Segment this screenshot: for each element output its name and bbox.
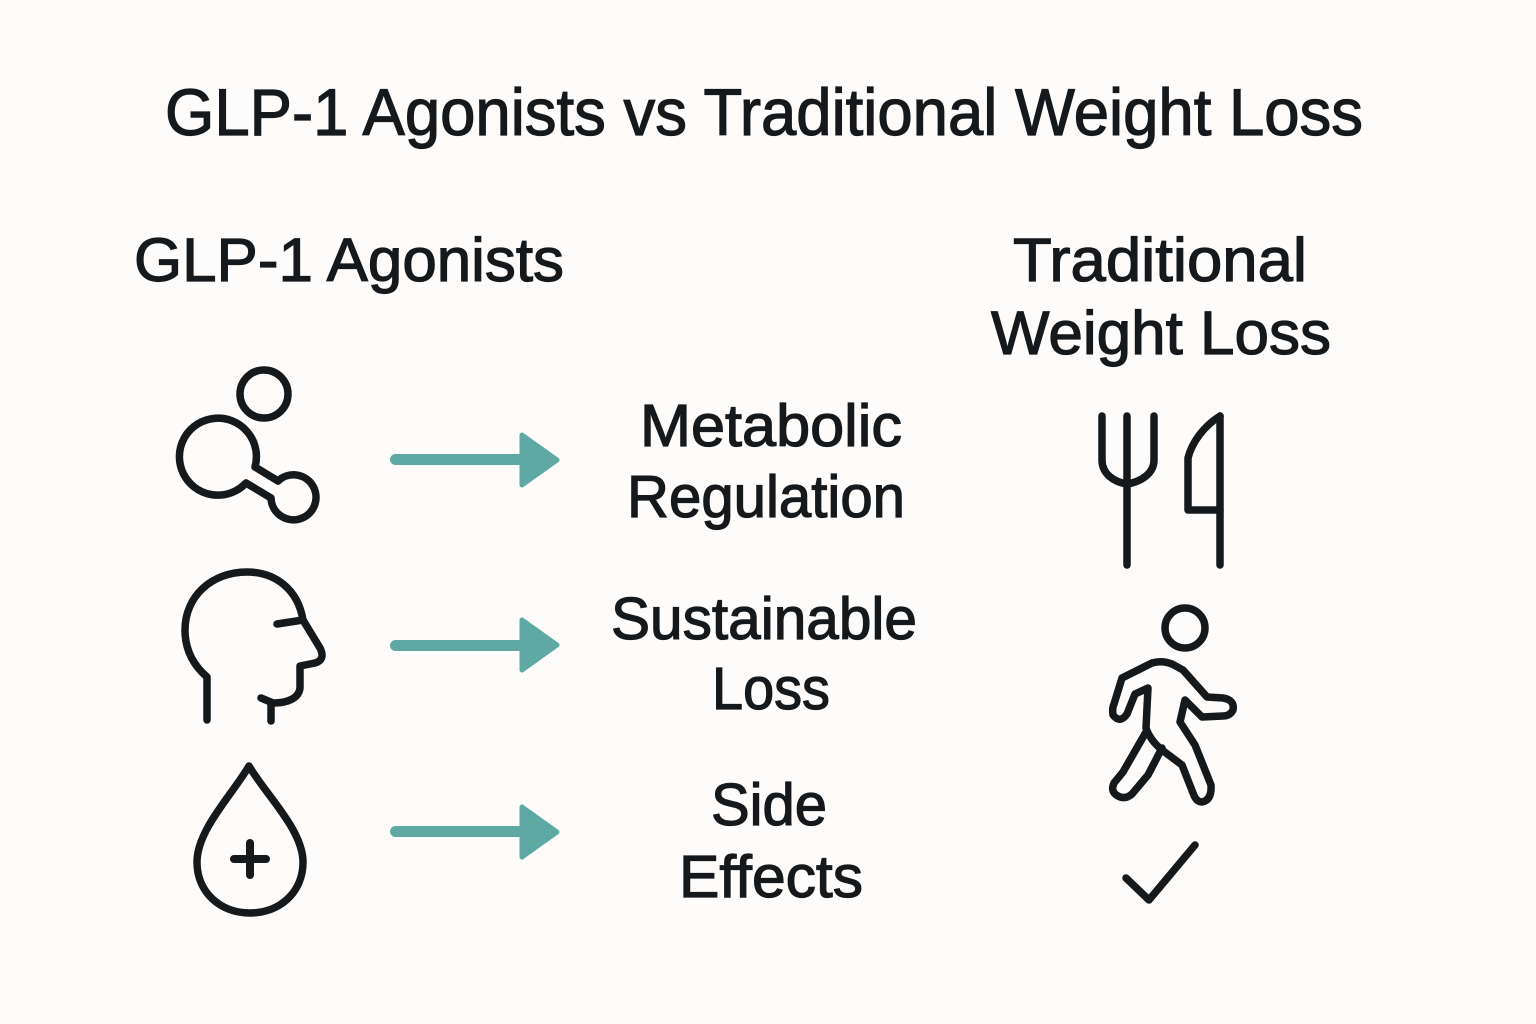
label: Side Effects — [679, 772, 863, 910]
icon: head profile — [185, 572, 322, 721]
heading: GLP-1 Agonists: GLP-1 Agonists — [134, 226, 564, 294]
heading: Traditional Weight Loss: Traditional — [1013, 226, 1307, 294]
title: GLP-1 Agonists vs Traditional Weight Loss — [165, 75, 1363, 149]
icon: check mark — [1126, 845, 1195, 900]
icon: walking person — [1113, 608, 1233, 802]
label: Side Effects: Side — [711, 772, 827, 838]
label: Metabolic Regulation: Regulation — [627, 464, 905, 530]
label: Metabolic Regulation — [627, 393, 905, 530]
icon: blood drop with plus — [197, 766, 303, 913]
label: Side Effects: Effects — [679, 844, 863, 910]
heading: Traditional Weight Loss: Weight Loss — [991, 299, 1331, 367]
arrow: row 3 — [390, 807, 557, 857]
arrow: row 1 — [390, 435, 557, 485]
label: Sustainable Loss: Sustainable — [611, 586, 917, 652]
label: Metabolic Regulation: Metabolic — [640, 393, 902, 459]
arrow: row 2 — [390, 620, 557, 670]
icon: fork and knife — [1102, 416, 1220, 565]
heading: Traditional Weight Loss — [991, 226, 1331, 367]
icon: molecule — [179, 370, 316, 520]
label: Sustainable Loss: Loss — [712, 656, 830, 722]
label: Sustainable Loss — [611, 586, 917, 722]
